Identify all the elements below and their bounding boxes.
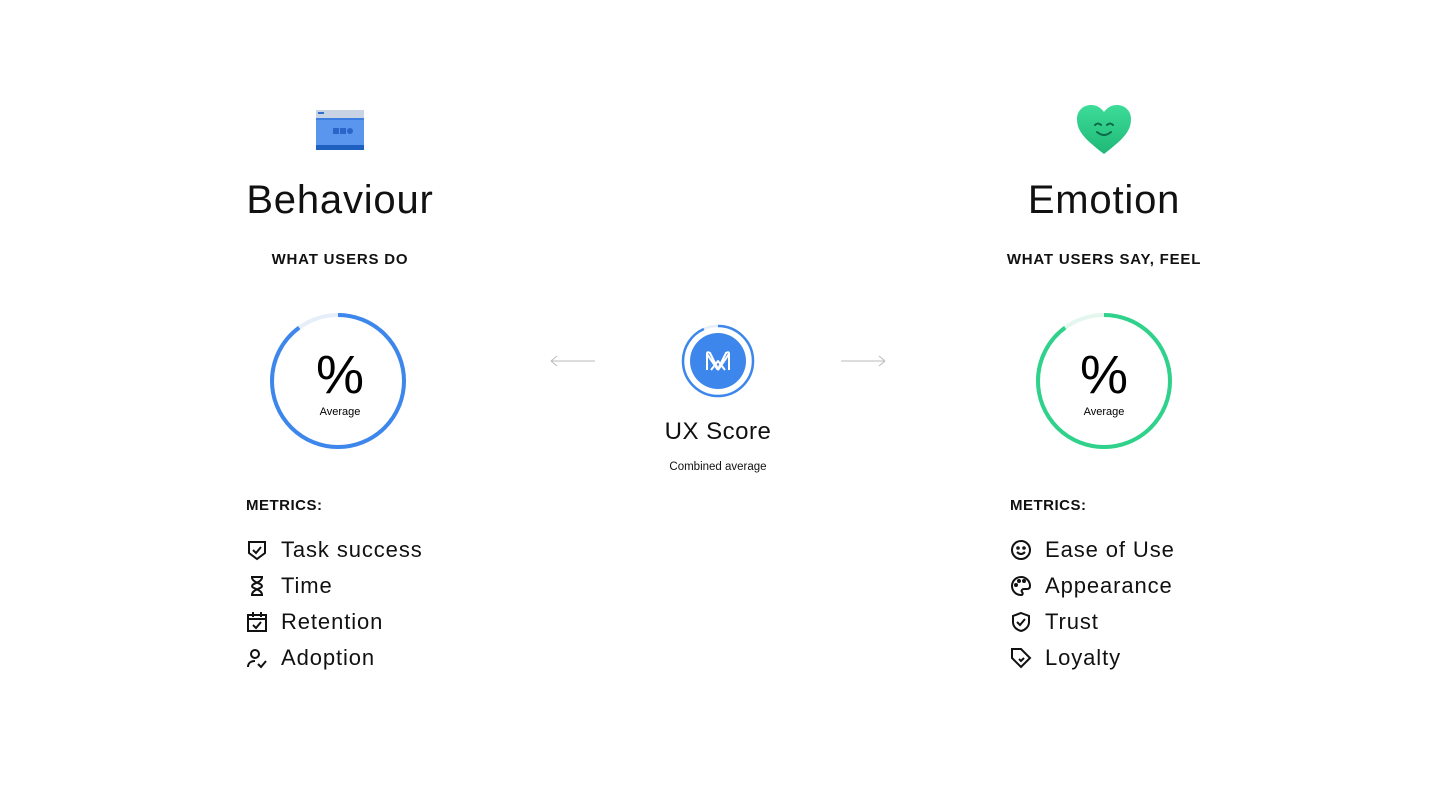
list: emotion metrics: Trust — [1045, 609, 1099, 634]
arrow: right — [841, 356, 886, 366]
arrow: left — [550, 356, 595, 366]
heading: Behaviour: Behaviour — [246, 178, 434, 222]
gauge: behaviour: Average — [320, 406, 360, 418]
list: emotion metrics: Appearance — [1045, 573, 1173, 598]
icon: ux score logo — [682, 324, 754, 398]
list: behaviour metrics: Time — [281, 573, 333, 598]
gauge: behaviour: % — [316, 345, 364, 405]
list: behaviour metrics: Task success — [281, 537, 423, 562]
list: emotion metrics — [1011, 537, 1175, 670]
subheading: what users do: WHAT USERS DO — [272, 251, 408, 268]
gauge: emotion — [1036, 313, 1172, 449]
list: behaviour metrics — [247, 537, 423, 670]
gauge: behaviour — [270, 313, 406, 449]
list: emotion metrics: Loyalty — [1045, 645, 1121, 670]
heading: Emotion: Emotion — [1028, 178, 1180, 222]
gauge: emotion: Average — [1084, 406, 1124, 418]
label: metrics: METRICS: — [246, 497, 322, 514]
icon: heart — [1077, 105, 1131, 154]
list: behaviour metrics: Adoption — [281, 645, 375, 670]
label: metrics: METRICS: — [1010, 497, 1086, 514]
icon: browser window — [316, 110, 364, 150]
list: emotion metrics: Ease of Use — [1045, 537, 1175, 562]
subheading: what users say, feel: WHAT USERS SAY, FEEL — [1007, 251, 1201, 268]
gauge: emotion: % — [1080, 345, 1128, 405]
heading: UX Score: UX Score — [665, 418, 771, 445]
list: behaviour metrics: Retention — [281, 609, 383, 634]
caption: combined average: Combined average — [669, 461, 767, 473]
